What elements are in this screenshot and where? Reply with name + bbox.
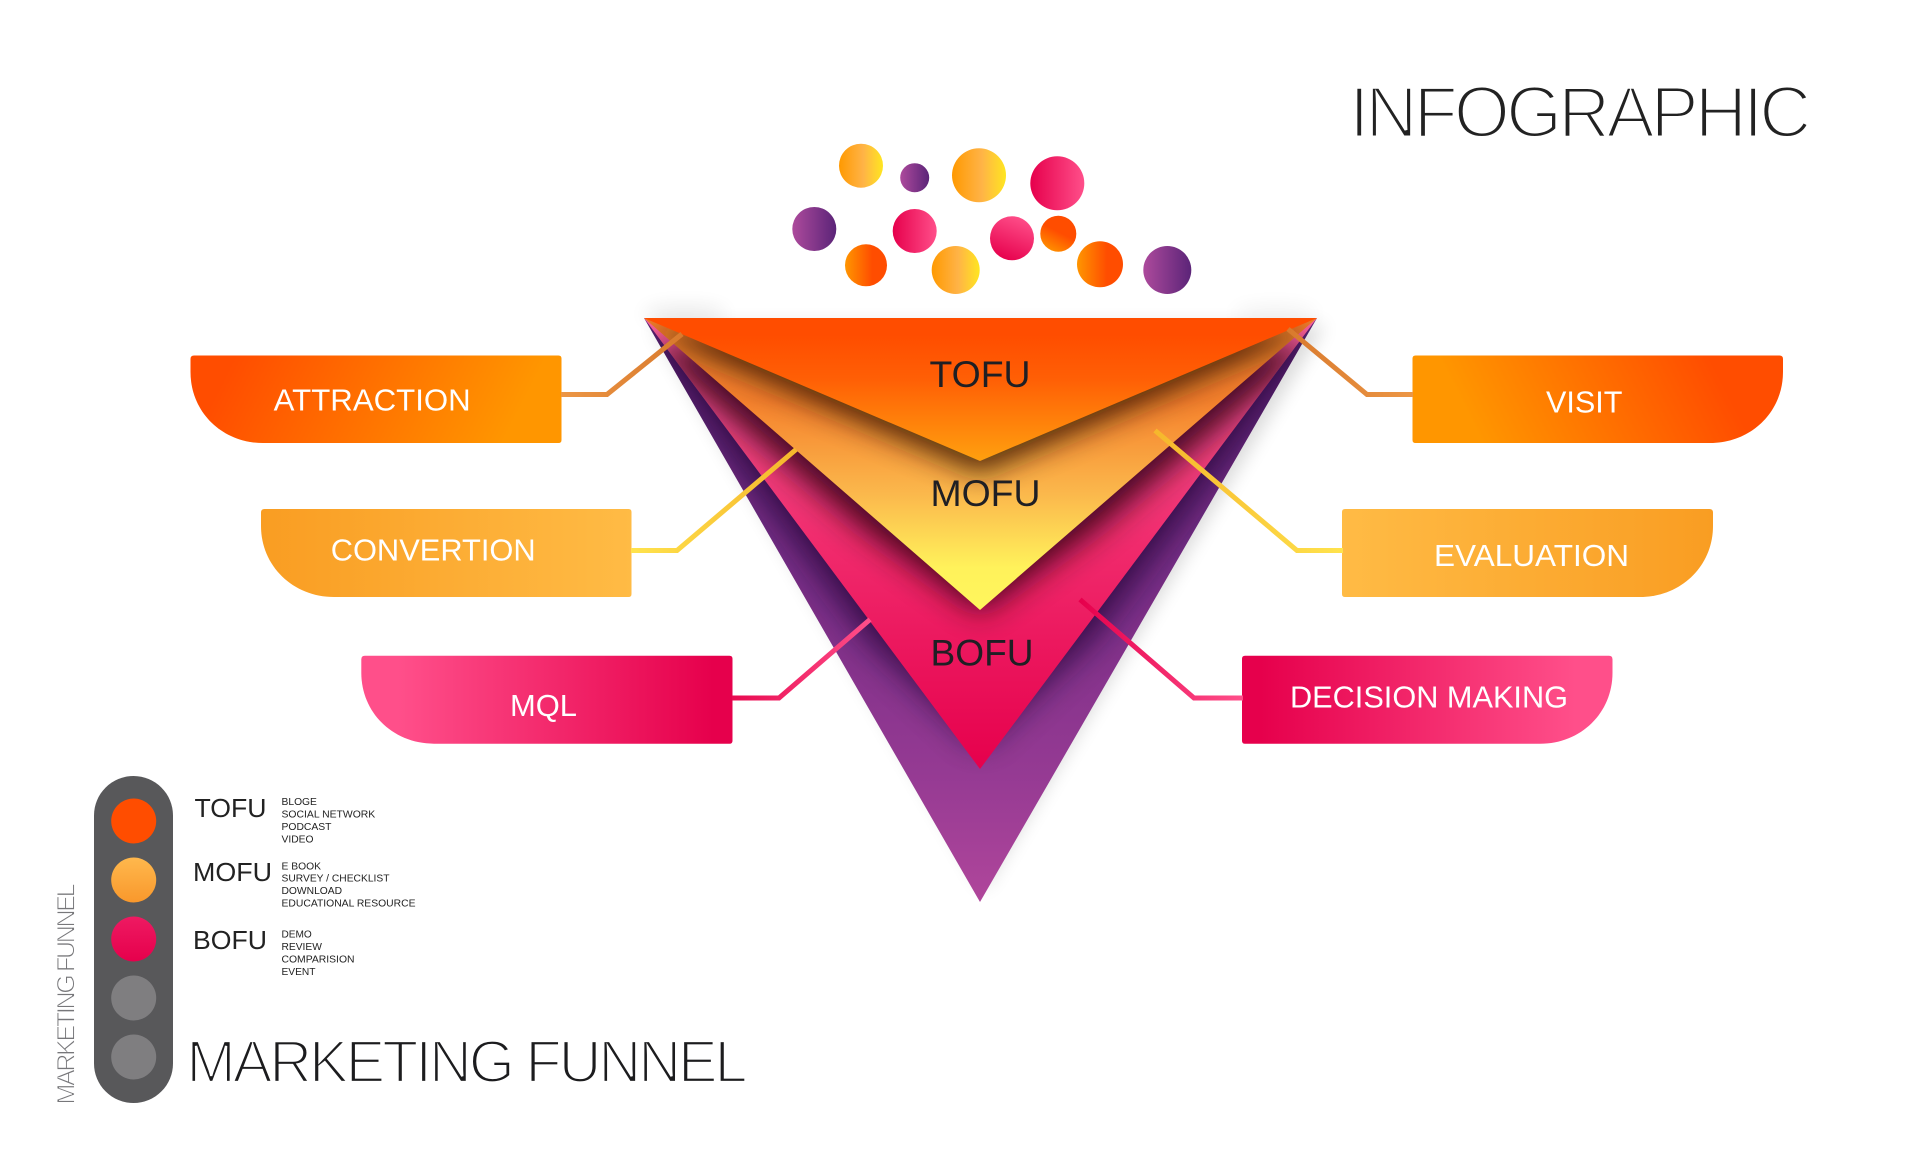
funnel layer: outer purple xyxy=(640,310,1320,910)
panel: MQL xyxy=(361,656,732,744)
legend indicator: traffic light tube xyxy=(94,776,173,1103)
particle: yellow-orange lower xyxy=(932,246,980,294)
label: convertion: CONVERTION xyxy=(331,532,536,568)
legend item: E BOOK xyxy=(282,861,321,872)
legend heading: MOFU: MOFU xyxy=(193,857,272,887)
panel: convertion xyxy=(261,509,632,597)
vertical label: marketing funnel: MARKETING FUNNEL xyxy=(52,883,80,1104)
funnel label: MOFU: MOFU xyxy=(930,473,1040,514)
particle: small orange xyxy=(1040,216,1076,252)
particle: orange right xyxy=(1077,241,1123,287)
connector: decision making xyxy=(1080,600,1243,698)
particle: yellow-orange xyxy=(839,144,883,188)
legend item: DOWNLOAD xyxy=(282,886,342,897)
connector: evaluation xyxy=(1155,430,1343,550)
legend item: BLOGE xyxy=(282,797,317,808)
panel: visit xyxy=(1412,356,1783,443)
connector: convertion xyxy=(631,450,796,550)
label: visit: VISIT xyxy=(1546,384,1623,419)
particle: orange xyxy=(845,244,887,286)
indicator dot: inactive xyxy=(111,976,156,1020)
indicator dot: inactive xyxy=(111,1034,156,1080)
decorative leads: particles entering the funnel xyxy=(792,144,1191,294)
particle: large yellow-orange xyxy=(952,148,1006,202)
particle: purple left xyxy=(792,207,836,251)
legend block: MOFU xyxy=(193,857,416,910)
label: MQL: MQL xyxy=(510,688,577,723)
legend item: VIDEO xyxy=(282,834,314,846)
connector: visit xyxy=(1288,329,1413,394)
legend item: SOCIAL NETWORK xyxy=(282,810,375,820)
indicator dot: TOFU xyxy=(111,798,156,844)
legend item: COMPARISION xyxy=(282,954,354,966)
title: infographic: INFOGRAPHIC xyxy=(1349,73,1811,153)
particle: large pink xyxy=(1030,156,1084,210)
particle: purple right xyxy=(1143,246,1191,294)
connector: attraction xyxy=(561,334,682,394)
legend heading: TOFU: TOFU xyxy=(194,793,266,823)
label: decision making: DECISION MAKING xyxy=(1290,680,1568,715)
funnel label: TOFU: TOFU xyxy=(930,354,1030,395)
particle: pink xyxy=(893,209,937,253)
connector: MQL xyxy=(732,620,870,698)
panel: attraction xyxy=(190,356,562,443)
funnel layer: BOFU xyxy=(640,310,1320,780)
legend item: DEMO xyxy=(282,930,312,940)
legend block: TOFU xyxy=(194,793,375,846)
particle: small purple xyxy=(900,163,929,192)
particle: pink diagonal xyxy=(990,216,1034,260)
legend item: EDUCATIONAL RESOURCE xyxy=(282,899,416,910)
funnel layer: MOFU xyxy=(640,310,1320,620)
panel: decision making xyxy=(1242,656,1612,744)
indicator dot: BOFU xyxy=(111,916,156,962)
label: evaluation: EVALUATION xyxy=(1434,538,1629,573)
legend block: BOFU xyxy=(193,925,354,978)
legend item: EVENT xyxy=(282,967,316,978)
legend heading: BOFU: BOFU xyxy=(193,925,267,955)
legend item: REVIEW xyxy=(282,942,322,953)
funnel layer: TOFU xyxy=(644,318,1317,461)
funnel label: BOFU: BOFU xyxy=(930,633,1034,674)
legend item: SURVEY / CHECKLIST xyxy=(282,874,390,885)
panel: evaluation xyxy=(1342,509,1713,597)
funnel xyxy=(640,305,1325,910)
legend item: PODCAST xyxy=(282,822,332,833)
indicator dot: MOFU xyxy=(111,858,156,902)
label: attraction: ATTRACTION xyxy=(274,383,471,418)
heading: marketing funnel: MARKETING FUNNEL xyxy=(186,1029,748,1095)
